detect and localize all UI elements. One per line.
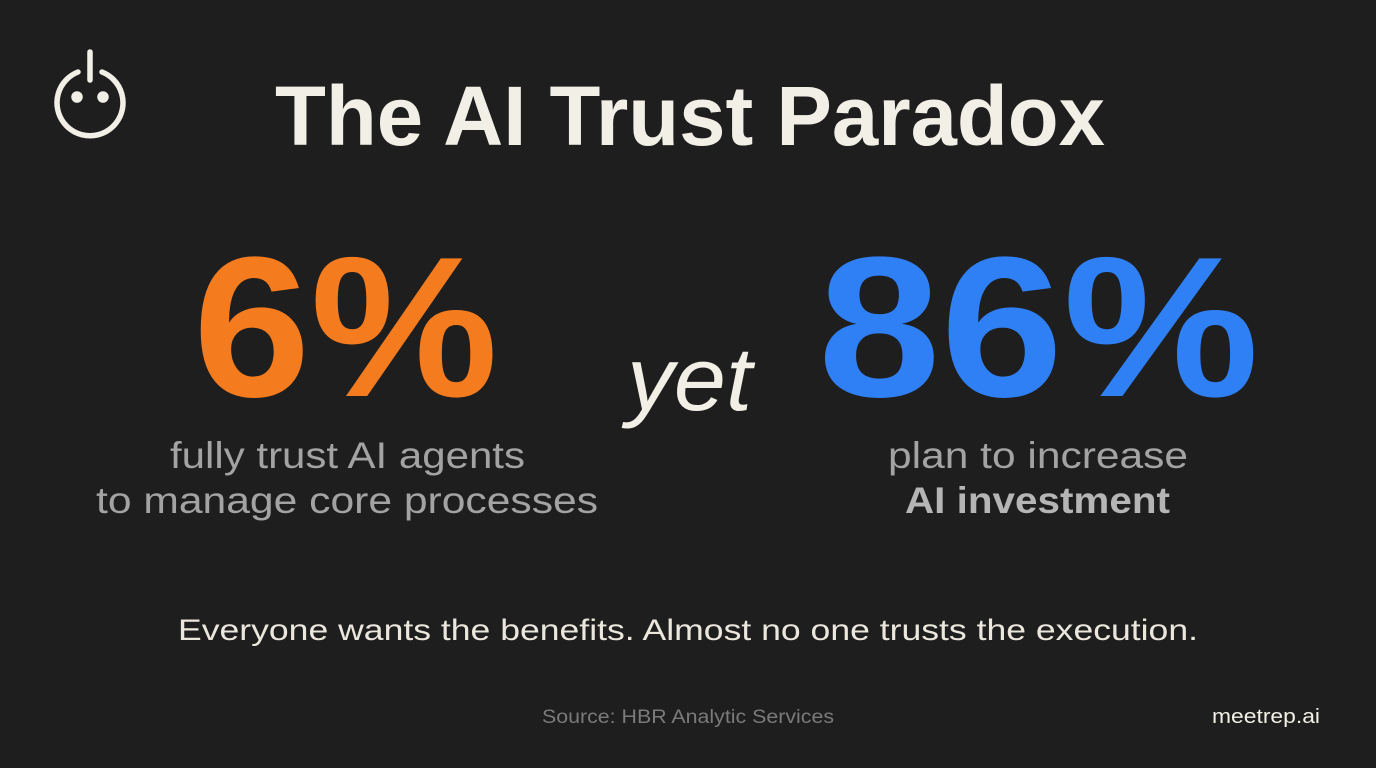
text block: right caption: [888, 435, 1188, 521]
stat: 86%: 86%: [818, 216, 1259, 439]
text block: right caption: AI investment: [905, 480, 1170, 521]
icon: power logo: [57, 52, 123, 136]
text block: left caption: to manage core processes: [96, 480, 598, 521]
text block: left caption: [96, 435, 598, 521]
source: Source: HBR Analytic Services: [542, 707, 834, 728]
connector: yet: yet: [621, 330, 756, 430]
text block: left caption: fully trust AI agents: [170, 435, 525, 476]
title: The AI Trust Paradox: [275, 69, 1105, 163]
brand: meetrep.ai: [1212, 706, 1320, 728]
tagline: Everyone wants the benefits. Almost no one trusts the execution.: [178, 614, 1198, 647]
text block: right caption: plan to increase: [888, 435, 1188, 476]
stat: 6%: 6%: [193, 216, 498, 439]
